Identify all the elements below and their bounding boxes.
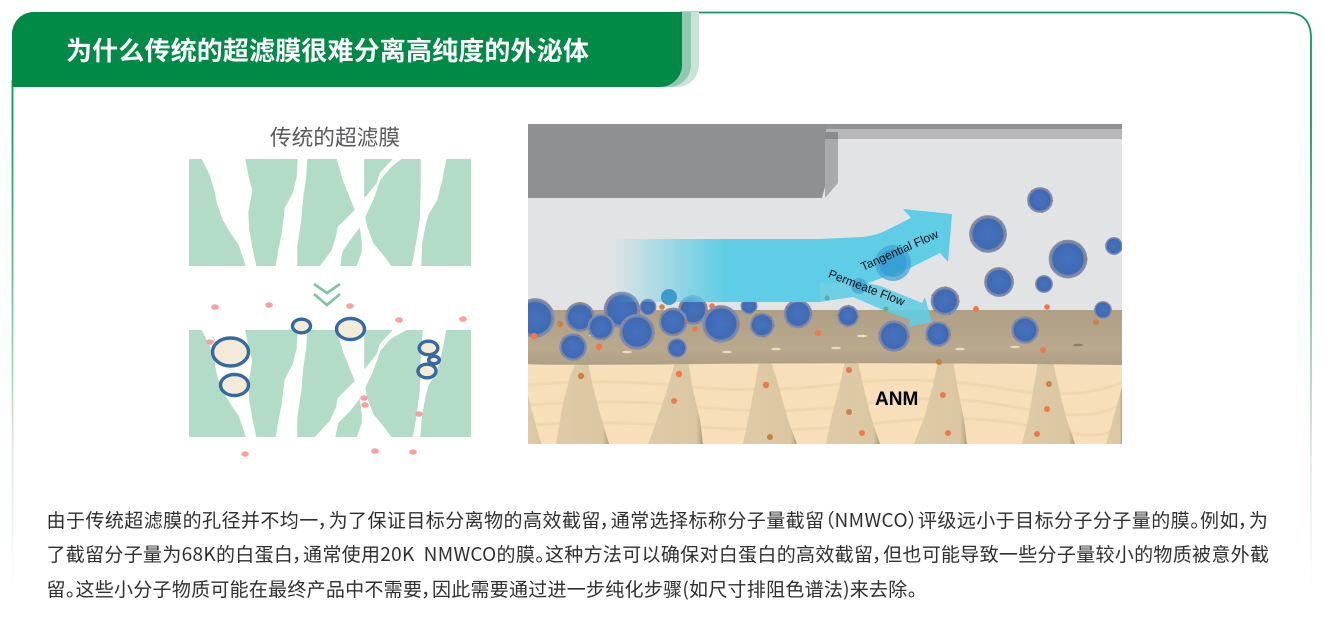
particles: small pink molecules (206, 302, 467, 457)
label: ANM: ANM (875, 389, 918, 410)
flow arrows (610, 209, 952, 327)
upper membrane (189, 159, 471, 266)
lower membrane (189, 330, 471, 437)
membrane panel heading: 传统的超滤膜 (270, 121, 400, 152)
free exosomes in the chamber (930, 187, 1123, 319)
title banner (12, 12, 699, 87)
label: Tangential Flow: Tangential Flow (859, 227, 941, 274)
small orange molecules (531, 303, 1099, 440)
grey channel wall (528, 124, 1122, 198)
chevrons (314, 284, 340, 305)
particles: blue-ringed exosomes (212, 318, 439, 396)
pore cones (528, 362, 1122, 444)
tangential flow illustration (528, 124, 1122, 444)
label: Permeate Flow: Permeate Flow (826, 267, 907, 309)
explanatory paragraph (46, 506, 1269, 602)
title text: 为什么传统的超滤膜很难分离高纯度的外泌体 (66, 31, 589, 68)
explanatory paragraph: 由于传统超滤膜的孔径并不均一，为了保证目标分离物的高效截留，通常选择标称分子量截留（NMWCO）评级远小于目标分子分子量的膜。例如，为 (46, 506, 1268, 533)
filter cake layer (525, 310, 1122, 365)
chamber background (528, 124, 1122, 311)
explanatory paragraph: 留。这些小分子物质可能在最终产品中不需要，因此需要通过进一步纯化步骤(如尺寸排阻色谱法)来去除。 (46, 575, 917, 602)
exosomes resting on membrane (515, 292, 1039, 361)
explanatory paragraph: 了截留分子量为68K的白蛋白，通常使用20K NMWCO的膜。这种方法可以确保对白蛋白的高效截留，但也可能导致一些分子量较小的物质被意外截 (46, 540, 1269, 567)
support layer (528, 362, 1122, 444)
